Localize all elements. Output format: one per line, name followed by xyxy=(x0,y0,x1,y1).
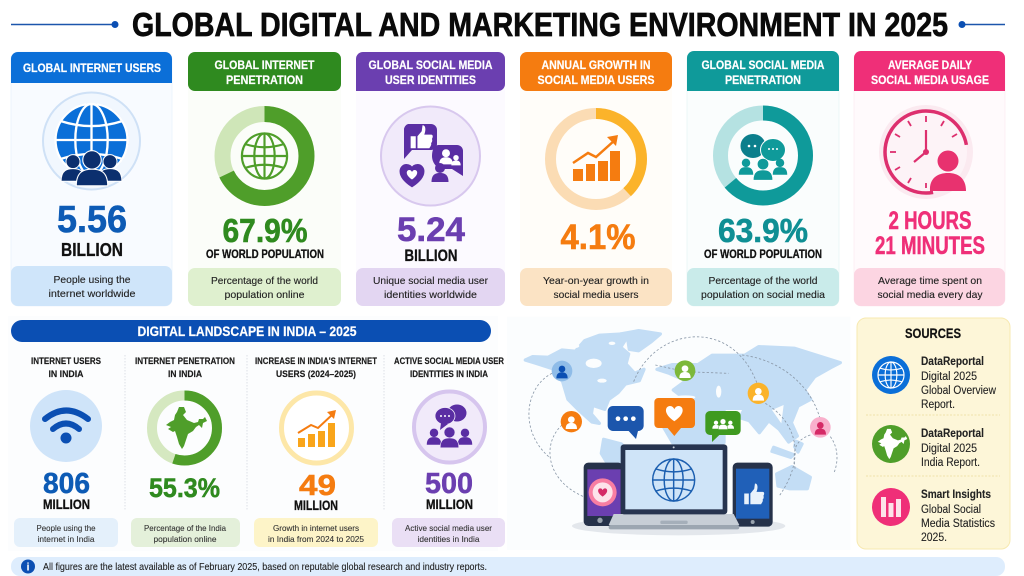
unit: MILLION xyxy=(43,496,90,512)
caption xyxy=(687,268,839,306)
caption: identities in India xyxy=(418,534,480,544)
value: 67.9% xyxy=(222,212,308,249)
caption xyxy=(356,268,505,306)
panel: annual growth in social media users xyxy=(520,52,672,306)
footer note xyxy=(11,557,1005,576)
caption: Growth in internet users xyxy=(273,523,359,533)
caption: population online xyxy=(154,534,217,544)
panel: digital landscape in India xyxy=(8,316,505,551)
header: user identities: USER IDENTITIES xyxy=(385,73,476,87)
header: social media penetration xyxy=(687,51,839,91)
heading: INTERNET PENETRATION xyxy=(135,356,235,367)
heading xyxy=(135,356,235,380)
source: Smart Insights: Smart Insights xyxy=(921,489,991,501)
caption: People using the xyxy=(54,274,131,286)
icon: social media bubbles xyxy=(381,106,480,206)
header: global internet users: GLOBAL INTERNET USERS xyxy=(23,61,161,75)
stat: internet penetration in India xyxy=(131,356,240,547)
caption: Percentage of the India xyxy=(144,523,226,533)
header: annual growth: ANNUAL GROWTH IN xyxy=(542,58,650,72)
value: 49 xyxy=(299,470,336,502)
source: DataReportal India: India Report. xyxy=(921,457,980,469)
value: 5.24 xyxy=(397,211,465,249)
chart: donut 63.9% with chat people xyxy=(720,113,806,198)
value: 500 xyxy=(425,468,473,500)
header: annual growth xyxy=(520,52,672,91)
caption xyxy=(188,268,341,306)
panel: sources xyxy=(857,318,1010,549)
stat: increase in India's internet users xyxy=(254,356,378,547)
heading: IDENTITIES IN INDIA xyxy=(410,369,488,380)
shadow xyxy=(572,517,785,535)
heading xyxy=(255,356,377,380)
chat bubble green with people xyxy=(705,411,741,442)
source: DataReportal global: Report. xyxy=(921,399,955,411)
source: DataReportal India: Digital 2025 xyxy=(921,443,977,455)
value: 2 hours 21 minutes xyxy=(875,207,985,260)
map lakes and seas xyxy=(571,342,784,425)
value: 4.1% xyxy=(560,218,636,257)
heading xyxy=(394,356,504,380)
heading: USERS (2024–2025) xyxy=(276,369,356,380)
section heading xyxy=(11,320,491,342)
title accent left xyxy=(11,21,118,28)
caption xyxy=(14,518,118,547)
header: annual growth: SOCIAL MEDIA USERS xyxy=(538,73,654,87)
header: daily usage xyxy=(854,51,1005,91)
header: social media penetration: PENETRATION xyxy=(725,73,801,87)
chat bubble blue xyxy=(608,406,644,439)
avatar blue xyxy=(552,361,572,381)
caption: population online xyxy=(224,289,305,301)
value: 63.9% xyxy=(718,212,808,249)
caption xyxy=(392,518,505,547)
source: DataReportal India xyxy=(872,425,984,469)
avatar green xyxy=(675,360,695,381)
sources heading: SOURCES xyxy=(905,325,961,341)
source: DataReportal global: Digital 2025 xyxy=(921,371,977,383)
source: DataReportal India: DataReportal xyxy=(921,428,984,440)
phone right with thumbs up xyxy=(733,463,773,527)
caption: internet worldwide xyxy=(48,288,136,300)
unit: MILLION xyxy=(294,497,338,513)
caption xyxy=(254,518,378,547)
icon: globe with people xyxy=(43,92,140,190)
source: Smart Insights: Media Statistics xyxy=(921,518,995,530)
heading: ACTIVE SOCIAL MEDIA USER xyxy=(394,356,504,367)
heading xyxy=(31,356,101,380)
avatar pink xyxy=(810,417,831,438)
header: social media penetration: GLOBAL SOCIAL MEDIA xyxy=(702,58,825,72)
heading: INTERNET USERS xyxy=(31,356,101,367)
source: DataReportal global xyxy=(872,356,997,411)
caption: Unique social media user xyxy=(373,275,488,287)
header: daily usage: SOCIAL MEDIA USAGE xyxy=(871,73,989,87)
icon: info xyxy=(21,560,35,574)
avatar yellow xyxy=(748,383,769,404)
section heading: DIGITAL LANDSCAPE IN INDIA – 2025 xyxy=(138,324,357,339)
header: user identities xyxy=(356,52,505,91)
caption xyxy=(854,268,1005,306)
caption: Active social media user xyxy=(405,523,492,533)
heading: INCREASE IN INDIA'S INTERNET xyxy=(255,356,377,367)
caption xyxy=(131,518,240,547)
stat: internet users in India xyxy=(14,356,118,547)
dashed connection arcs xyxy=(529,337,837,497)
heading: IN INDIA xyxy=(168,369,202,380)
world map continents xyxy=(525,331,840,489)
unit: OF WORLD POPULATION xyxy=(704,247,822,261)
source: DataReportal global: DataReportal xyxy=(921,356,984,368)
caption: People using the xyxy=(36,523,96,533)
caption: social media every day xyxy=(878,289,983,301)
caption: internet in India xyxy=(38,534,95,544)
header: global internet users xyxy=(11,52,172,83)
title accent right xyxy=(958,21,1005,28)
illustration: world map with devices xyxy=(507,317,850,550)
avatar orange xyxy=(561,411,582,432)
chart: ring with growth bars xyxy=(550,114,642,204)
panel: global internet users xyxy=(11,52,172,306)
unit: BILLION xyxy=(404,247,458,265)
value: 806 xyxy=(43,468,90,500)
icon: info: i xyxy=(26,562,30,574)
caption: in India from 2024 to 2025 xyxy=(268,534,364,544)
header: internet penetration: PENETRATION xyxy=(226,73,303,87)
header: user identities: GLOBAL SOCIAL MEDIA xyxy=(368,58,493,72)
value: 2 hours 21 minutes: 21 MINUTES xyxy=(875,232,985,260)
caption: Percentage of the world xyxy=(708,275,818,287)
heading: IN INDIA xyxy=(48,369,84,380)
caption: population on social media xyxy=(701,289,825,301)
source: Smart Insights: Global Social xyxy=(921,504,981,516)
value: 5.56 xyxy=(57,199,127,241)
laptop with globe xyxy=(609,444,739,529)
caption xyxy=(11,266,172,306)
stat: active social media users in India xyxy=(392,356,505,547)
panel: global social media penetration xyxy=(687,51,839,306)
value: 2 hours 21 minutes: 2 HOURS xyxy=(888,207,972,235)
caption: Average time spent on xyxy=(878,275,982,287)
chart: donut 67.9% with globe xyxy=(222,114,306,198)
caption xyxy=(520,268,672,306)
icon: clock with person xyxy=(879,105,973,199)
unit: BILLION xyxy=(61,240,123,260)
icon: chat and people xyxy=(414,392,485,462)
phone left with heart xyxy=(584,463,623,526)
header: internet penetration xyxy=(188,52,341,91)
caption: Percentage of the world xyxy=(211,275,318,287)
icon: wifi xyxy=(30,390,102,462)
caption: identities worldwide xyxy=(384,289,477,301)
chart: donut 55.3% with India map xyxy=(152,396,217,460)
chat bubble orange with heart xyxy=(654,398,695,436)
source: Smart Insights: 2025. xyxy=(921,532,947,544)
header: daily usage: AVERAGE DAILY xyxy=(888,58,972,72)
header: internet penetration: GLOBAL INTERNET xyxy=(214,58,315,72)
icon: ring with growth bars xyxy=(282,393,352,463)
caption: Year-on-year growth in xyxy=(543,275,649,287)
source: DataReportal global: Global Overview xyxy=(921,385,997,397)
panel: global social media user identities xyxy=(356,52,505,306)
value: 55.3% xyxy=(149,473,220,503)
panel: global internet penetration xyxy=(188,52,341,306)
source: Smart Insights xyxy=(872,488,995,544)
footer text: All figures are the latest available as of February 2025, based on reputable global research and industry reports. xyxy=(43,562,487,573)
unit: OF WORLD POPULATION xyxy=(206,247,324,261)
caption: social media users xyxy=(554,289,638,301)
unit: MILLION xyxy=(426,496,473,512)
panel: average daily social media usage xyxy=(854,51,1005,306)
